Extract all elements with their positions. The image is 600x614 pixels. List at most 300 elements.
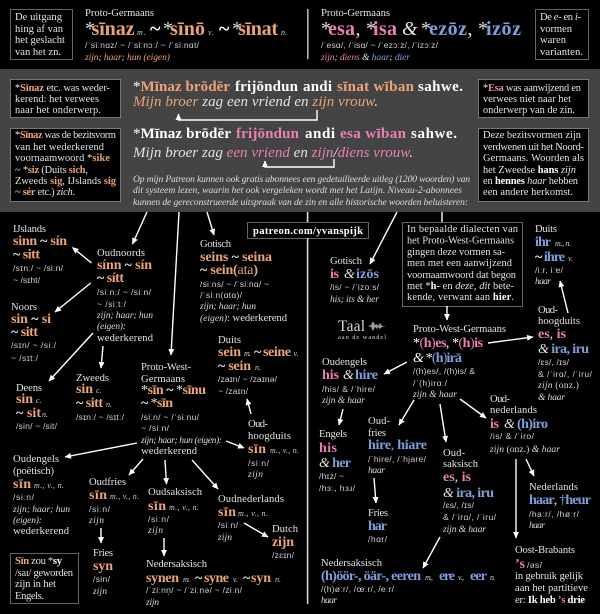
node: Noors: /sɪn/ ~ /siː/ — [11, 340, 57, 350]
node: IJslands — [13, 224, 67, 285]
node: Nedersaksisch (synen): syn — [251, 571, 271, 586]
node: Oudengels (his, hire): his — [322, 368, 340, 383]
note: reflexive: kerend: het verwees — [15, 94, 99, 105]
node: Nedersaksisch (synen): zijn — [145, 597, 159, 608]
arrow: PWG to Oudnederlands — [460, 399, 486, 418]
note: gender ending: De uitgang — [15, 12, 63, 23]
node: Zweeds: c. — [96, 386, 102, 395]
node: Proto-West-Germaans (sīn): /siːn/ ~ /ˈsiːnu/ — [141, 412, 200, 422]
node: Gotisch (right): /is/ ~ /ˈizoːs/ — [330, 282, 380, 292]
node: Oudnederlands (is, (h)iro): zijn (onz.) & haar — [489, 444, 560, 455]
node: IJslands: IJslands — [13, 224, 46, 235]
node: Noors: Noors — [11, 302, 37, 313]
note: gender ending: het geslacht — [15, 35, 65, 46]
reflexive possessive forms: sīnaz — [92, 18, 135, 40]
demonstrative forms: zijn; diens & haar; dier — [320, 52, 410, 63]
node: Proto-West-Germaans (his): *(h)es, *(h)is — [413, 336, 484, 351]
node: Nederlands: Nederlands — [529, 482, 578, 493]
arrow: PWG to Oudsaksisch — [440, 404, 446, 442]
Patreon paragraph — [133, 174, 470, 208]
note: *sy in English: Engels. — [15, 591, 44, 602]
node: Oudnoords: wederkerend — [97, 333, 154, 344]
demonstrative forms: /ˈesɑ/, /ˈisɑ/ ~ /ˈezɔːz/, /ˈizɔːz/ — [321, 40, 439, 50]
node: Oudsaksisch (sīn): sīn — [148, 499, 166, 514]
node: Nedersaksisch ((h)öör-) — [321, 558, 495, 606]
node: Nedersaksisch (synen): ~ — [195, 571, 203, 586]
node: Proto-West-Germaans (his): /(h)es/, /(h)is/ & — [413, 366, 475, 376]
node: Oudengels (poëtisch): Oudengels — [13, 454, 59, 465]
callout: dialect merge with *h- — [402, 222, 522, 306]
node: Oudhoogduits (sīn): sīn — [248, 442, 266, 457]
node: Nedersaksisch ((h)öör-): v., — [458, 573, 464, 582]
link box: patreon: patreon.com/yvanspijk — [253, 226, 363, 237]
arrow: Oudnederlands to Oost-Brabants — [515, 459, 517, 538]
arrow: band to Gotisch — [207, 212, 214, 235]
node: Deens: Deens — [16, 383, 42, 394]
node: Fries (syn): syn — [93, 559, 113, 574]
node: Nedersaksisch (synen): syne — [204, 571, 229, 586]
sentence 1 — [132, 79, 463, 110]
node: Nedersaksisch ((h)öör-): m., — [425, 573, 433, 582]
note: reflexive — [10, 80, 120, 118]
sentence 2: Mijn broer zag een vriend en zijn/diens vrouw. — [132, 145, 413, 161]
arrow: Oudnoords to IJslands — [72, 248, 92, 263]
node: Oudhoogduits (es, is): Oud- — [538, 305, 558, 316]
node: Noors: sin ~ si — [11, 312, 51, 327]
demonstrative forms: , — [468, 18, 472, 40]
node: Zweeds: sin — [76, 382, 93, 397]
note: disappeared in North Germanic — [478, 80, 588, 118]
demonstrative forms: * — [478, 18, 488, 40]
reflexive possessive forms: n. — [281, 28, 287, 37]
node: Duits (ihr): m., n. — [555, 239, 571, 248]
node: Gotisch (left): ~ sein(ata) — [200, 263, 258, 278]
demonstrative forms: ezōz — [429, 18, 467, 40]
note: possessive of *sike: van het wederkerend — [15, 142, 105, 153]
Patreon paragraph: dit systeem lezen, waarin het ook vergeleken wordt met het Latijn. Niveau-2-abonnees — [133, 185, 462, 196]
arrow: Oudnederlands to Dutch — [244, 523, 268, 537]
Patreon paragraph: Op mijn Patreon kunnen ook gratis abonnees een gedetailleerde uitleg (1200 woorden) van — [133, 174, 470, 185]
node: Oudsaksisch (es, is): zijn & haar — [442, 524, 486, 535]
node: Nedersaksisch ((h)öör-): (h)öör-, öär-, eeren — [321, 569, 421, 584]
node: Proto-West-Germaans (sīn): *sīn ~ *sīnu — [141, 383, 206, 398]
node: Duits (sein): sein — [218, 345, 241, 360]
node: Oudhoogduits (es, is) — [537, 305, 593, 403]
node: Oudsaksisch (es, is): & ira, iru — [443, 486, 494, 501]
note: reflexive: *Sīnaz etc. was weder- — [15, 83, 111, 94]
node: Oudnederlands (sīn): m., v., n. — [238, 509, 268, 518]
arrow: PWG to Oudhoogduits — [226, 441, 244, 448]
node: Oudengels (poëtisch) — [12, 454, 70, 537]
node: Duits (sein): m. — [244, 349, 251, 358]
node: Duits (ihr): ~ ihre — [535, 250, 565, 265]
node: Oudhoogduits (sīn) — [247, 419, 299, 480]
note: *sy in English: /saɪ/ geworden — [15, 568, 74, 579]
node: Oudhoogduits (es, is): zijn (onz.) — [537, 380, 579, 391]
note: gender ending — [10, 10, 72, 60]
arrow: Oudnederlands to Nederlands — [526, 459, 534, 476]
node: Proto-West-Germaans (his): zijn & haar — [412, 389, 457, 400]
node: Oudnederlands (is, (h)iro): & — [504, 417, 515, 432]
node: Oudhoogduits (sīn): /siːn/ — [248, 458, 270, 468]
node: Dutch (zijn): /zɛɪn/ — [272, 550, 295, 560]
node: Deens: ~ sit — [16, 406, 41, 421]
node: Oudfries (hire, hiare): fries — [368, 428, 386, 439]
note: possessive of *sike: ~ *siz (Duits sich, — [15, 165, 88, 176]
reflexive possessive forms: /ˈsiːnɑz/ ~ /ˈsiːnɔː/ ~ /ˈsiːnɑt/ — [85, 40, 200, 50]
node: Proto-West-Germaans (sīn): ~ *sīn — [141, 396, 173, 411]
node: Oudhoogduits (sīn): zijn — [247, 469, 263, 480]
node: Oudfries (sīn): Oudfries — [89, 477, 126, 488]
node: Oudhoogduits (sīn): Oud- — [248, 419, 268, 430]
node: Duits (sein): seine — [263, 345, 291, 360]
arrow: PWG to Engels branch — [339, 409, 343, 425]
node: Oudengels (poëtisch): m., v., n. — [34, 481, 64, 490]
node: Duits (ihr): ihr — [535, 235, 551, 250]
node: Oudsaksisch (sīn): zijn — [147, 525, 163, 536]
node: Deens: n. — [42, 410, 48, 419]
note: e- and i- variants: waren — [540, 35, 567, 46]
node: Oost-Brabants: er: Ik heb ʼs drie — [515, 595, 585, 606]
node: Oudengels (his, hire): Oudengels — [322, 357, 367, 368]
node: Gotisch (right): & — [344, 267, 355, 282]
demonstrative forms: * — [366, 18, 376, 40]
node: Gotisch (left) — [199, 239, 288, 324]
callout: dialect merge with *h-: men met een aanwijzend — [407, 258, 513, 269]
node: Proto-West-Germaans (sīn): Germaans — [141, 374, 185, 385]
node: Oudfries (hire, hiare): hire, hiare — [368, 438, 427, 453]
arrow: Oudnoords to Zweeds — [101, 346, 103, 368]
node: Oudnederlands (is, (h)iro): Oud- — [490, 394, 510, 405]
node: IJslands: /sɪnː/ ~ /siːn/ — [13, 263, 64, 273]
sentence 1: sahwe. — [418, 79, 463, 95]
node: Nedersaksisch ((h)öör-): /(h)øːr/, /œːr/, /eːr/ — [321, 584, 395, 594]
node: Deens: c. — [36, 396, 42, 405]
divider — [307, 9, 309, 59]
node: Oudfries (sīn): m., v., n. — [110, 492, 139, 501]
node: Oudnoords: zijn; haar; hun — [96, 310, 153, 321]
sentence 2: esa wīban — [340, 126, 407, 142]
node: Dutch (zijn): Dutch — [272, 524, 299, 535]
Patreon paragraph: kunnen de gereconstrueerde uitspraak van de zin en alle historische woorden beluisteren: — [133, 197, 468, 208]
note: e- and i- variants: varianten. — [540, 47, 583, 58]
node: Engels: /hɪz/ ~ — [319, 471, 344, 481]
callout: dialect merge with *h-: met *h- en deze, dit bete- — [407, 281, 515, 292]
note: possessive of *sike: voornaamwoord *sike — [15, 153, 110, 164]
node: Oudengels (poëtisch): sīn — [13, 477, 31, 492]
node: Oudengels (his, hire): zijn & haar — [321, 395, 365, 406]
node: Zweeds: ~ sitt — [76, 396, 103, 411]
node: Oudfries (sīn): zijn — [88, 515, 104, 526]
node: Oudnoords: ~ sítt — [97, 271, 124, 286]
icon: sound wave — [368, 321, 386, 331]
node: Gotisch (right): Gotisch — [330, 256, 363, 267]
reflexive possessive forms: * — [85, 18, 95, 40]
node: Fries (har): /hɑr/ — [368, 534, 388, 544]
node: Engels — [319, 429, 356, 493]
node: Oost-Brabants: ʼs — [515, 557, 526, 572]
node: Oudnederlands (is, (h)iro) — [489, 394, 560, 455]
arrow: Oudsaksisch to Nedersaksisch — [423, 537, 440, 568]
node: Oudsaksisch (es, is): /ɛs/, /ɪs/ — [443, 500, 475, 510]
node: Oudsaksisch (es, is): es, is — [443, 470, 472, 485]
node: Proto-West-Germaans (his): Proto-West-Germaans — [413, 324, 506, 335]
node: Deens: sin — [16, 392, 33, 407]
node: Oudfries (hire, hiare): /ˈhire/, /ˈhjare/ — [368, 454, 427, 464]
arrow: Oudfries to Fries — [100, 528, 102, 543]
node: Zweeds: Zweeds — [76, 373, 109, 384]
sentence 2: andi — [305, 126, 335, 142]
node: Nedersaksisch (synen): /ˈziːnn̩/ ~ /ˈziːnə/ ~ /ziːn/ — [146, 585, 243, 595]
demonstrative forms: * — [421, 18, 431, 40]
note: disappeared in North Germanic: verwees niet naar het — [483, 94, 571, 105]
node: Fries (har): har — [368, 519, 387, 534]
node: Oudnederlands (sīn): sīn — [218, 505, 236, 520]
arrow: PWG to Oudengels — [65, 443, 137, 457]
demonstrative forms: isa — [373, 18, 397, 40]
reflexive possessive forms: Proto-Germaans — [85, 8, 154, 19]
arrow: Oudnoords to Noors — [55, 283, 91, 312]
node: Duits (sein): n. — [255, 363, 261, 372]
note: gender ending: hing af van — [15, 24, 64, 35]
node: Fries (syn): Fries — [93, 548, 113, 559]
node: Oudhoogduits (sīn): hoogduits — [248, 431, 291, 442]
node: Nederlands: haar — [529, 520, 545, 531]
node: IJslands: sinn ~ sín — [13, 234, 67, 249]
node: Oudnoords: /siːnː/ ~ /siːn/ — [97, 287, 152, 297]
demonstrative forms: * — [321, 18, 331, 40]
callout: dialect merge with *h-: voornaamwoord dat begon — [407, 270, 517, 281]
node: Deens — [16, 383, 58, 431]
node: Oost-Brabants: /əs/ — [527, 560, 543, 570]
node: Proto-West-Germaans (sīn): ~ /siːn/ — [141, 423, 170, 433]
note: possessive of *sike: ~ sér etc.) zich. — [15, 187, 75, 198]
node: Oudengels (poëtisch): (eigen): — [13, 515, 42, 526]
node: Duits (sein): ~ sein — [218, 359, 251, 374]
tree divider — [307, 238, 308, 604]
node: Oudfries (hire, hiare): haar — [368, 465, 385, 476]
sentence 2: frijōndun — [236, 126, 300, 142]
node: Oudnederlands (is, (h)iro): is — [490, 417, 500, 432]
node: Oudsaksisch (sīn): m., v., n. — [169, 503, 199, 512]
sentence 2: sahwe. — [411, 126, 457, 142]
demonstrative forms: izōz — [486, 18, 521, 40]
node: Dutch (zijn) — [272, 524, 299, 560]
node: Nedersaksisch (synen): v. — [233, 575, 238, 584]
node: Oudnederlands (sīn): Oudnederlands — [218, 494, 284, 505]
sentence 1: *Mīnaz brōdēr — [133, 79, 230, 95]
node: Zweeds: /sɪnː/ ~ /sɪtː/ — [76, 412, 125, 422]
node: Proto-West-Germaans (sīn) — [140, 362, 222, 457]
node: Engels: Engels — [319, 429, 347, 440]
node: Oudengels (his, hire): hire — [355, 368, 378, 383]
note: North Germanic possessives: Deze bezitsvormen zijn — [483, 130, 582, 141]
node: Oost-Brabants — [515, 545, 588, 606]
node: Gotisch (left): zijn; haar; hun — [199, 301, 256, 312]
arrow: PWG to Oudengels — [384, 362, 407, 374]
node: IJslands: ~ /sɪht/ — [13, 275, 41, 285]
node: Duits (ihr): haar — [535, 276, 551, 287]
note: possessive of *sike — [10, 128, 120, 202]
sentence 1: andi — [303, 79, 332, 95]
note: *sy in English — [10, 554, 78, 604]
node: Duits (ihr): /iːr, iːɐ/ — [535, 265, 564, 275]
node: Fries (har): Fries — [368, 508, 388, 519]
node: Nederlands: haar, †heur — [529, 493, 591, 508]
node: Oudnederlands (is, (h)iro): (h)iro — [517, 417, 548, 432]
node: Oudfries (hire, hiare): Oud- — [368, 416, 390, 427]
node: Oudsaksisch (es, is): saksisch — [443, 459, 479, 470]
node: Duits (ihr): Duits — [535, 224, 557, 235]
demonstrative forms: & — [402, 18, 418, 40]
node: Gotisch (left): /ˈsiːn(ɑtɑ)/ — [200, 290, 243, 300]
reflexive possessive forms: ~ — [219, 18, 230, 40]
arrow: zijn refers to vriend — [265, 159, 334, 167]
arrow: band to Proto-West-Germaans — [171, 212, 179, 355]
node: Oudfries (sīn): /siːn/ — [89, 504, 111, 514]
node: Oudengels (his, hire): /his/ & /ˈhire/ — [322, 384, 376, 394]
node: Duits (sein): ~ /zaɪn/ — [218, 386, 249, 396]
arrow: PWG to Oudfries — [129, 459, 143, 475]
node: Zweeds — [76, 373, 125, 422]
node: Oudsaksisch (sīn): /siːn/ — [148, 514, 170, 524]
node: Gotisch (left): (eigen): wederkerend — [200, 313, 288, 324]
logo: Taal aan de wandel — [338, 318, 386, 341]
reflexive possessive forms: zijn; haar; hun (eigen) — [84, 52, 170, 63]
node: Oudhoogduits (es, is): hoogduits — [538, 316, 580, 327]
arrow: PWG to Oudsaksisch — [165, 460, 166, 484]
node: Proto-West-Germaans (sīn): Proto-West- — [141, 362, 191, 373]
node: Nedersaksisch ((h)öör-): ere — [439, 569, 455, 584]
node: Oudengels (poëtisch): (poëtisch) — [13, 466, 54, 477]
note: North Germanic possessives: en hennes haar hebben — [483, 176, 579, 187]
node: Oudsaksisch (sīn): Oudsaksisch — [148, 487, 203, 498]
node: Duits (sein): Duits — [218, 335, 241, 346]
node: Oudnederlands (sīn): /siːn/ — [218, 520, 239, 530]
logo: Taal aan de wandel: aan de wandel — [338, 334, 386, 341]
note: North Germanic possessives: een andere herkomst. — [483, 187, 573, 198]
node: Oudhoogduits (es, is): & ira, iru — [538, 342, 589, 357]
node: Proto-West-Germaans (his): & *(h)irā — [413, 351, 462, 366]
reflexive possessive forms: m. — [137, 28, 146, 37]
node: Nedersaksisch (synen): synen — [146, 571, 179, 586]
node: Gotisch (right): is — [330, 267, 340, 282]
node: Oudhoogduits (es, is): es, is — [538, 327, 567, 342]
node: Duits (ihr): v. — [568, 254, 573, 263]
arrow: Oudsaksisch to Nedersaksisch — [163, 538, 165, 556]
node: Noors: ~ sitt — [11, 325, 38, 340]
node: Nedersaksisch (synen): ~ — [243, 571, 251, 586]
node: Oost-Brabants: in gebruik gelijk — [515, 571, 584, 582]
node: Gotisch (left): Gotisch — [200, 239, 232, 250]
node: Oudsaksisch (es, is): Oud- — [443, 448, 465, 459]
note: e- and i- variants: De e- en i- — [540, 12, 581, 23]
node: Deens: /sin/ ~ /sit/ — [16, 421, 58, 431]
node: Engels: his — [319, 441, 338, 456]
node: Zweeds: n. — [106, 400, 112, 409]
connector: band to callout — [441, 212, 443, 222]
node: Proto-West-Germaans (his) — [412, 324, 506, 400]
node: Fries (syn) — [92, 548, 113, 597]
logo: Taal aan de wandel: Taal — [338, 318, 365, 335]
arrow: PWG to Oudhoogduits — [488, 337, 533, 343]
link box: patreon — [248, 222, 368, 238]
node: Oudsaksisch (es, is) — [442, 448, 497, 535]
reflexive possessive forms: ~ — [150, 18, 161, 40]
arrow: Oudhoogduits to Duits — [247, 399, 251, 414]
note: North Germanic possessives: het Zweedse hans zijn — [483, 165, 576, 176]
node: Duits (sein): /zaɪn/ ~ /zaɪnə/ — [218, 374, 278, 384]
arrow: Oudfries to Fries — [374, 478, 376, 503]
node: Gotisch (right): izōs — [356, 267, 380, 282]
node: Oudhoogduits (es, is): /ɛs/, /ɪs/ — [538, 357, 570, 367]
node: Oudsaksisch (es, is): & /ˈirɑ/, /ˈiru/ — [443, 512, 497, 522]
node: Oudnoords: sínn ~ sín — [97, 258, 152, 273]
node: Nedersaksisch ((h)öör-): Nedersaksisch — [321, 558, 383, 569]
node: Nedersaksisch ((h)öör-): n. — [490, 573, 495, 582]
demonstrative forms: , — [356, 18, 360, 40]
note: e- and i- variants — [536, 10, 588, 60]
node: Oost-Brabants: Oost-Brabants — [515, 545, 575, 556]
node: Proto-West-Germaans (sīn): zijn; haar; hun (eigen): — [140, 435, 222, 446]
node: Oudfries (sīn): sīn — [89, 488, 107, 503]
node: Oudengels (his, hire): & — [343, 368, 354, 383]
node: Duits (sein) — [218, 335, 298, 396]
callout: dialect merge with *h-: het Proto-West-Germaans — [407, 236, 514, 246]
node: Oudsaksisch (sīn) — [147, 487, 203, 536]
arrow: callout to Proto-West-Germaans — [446, 306, 448, 320]
note: *sy in English: Sīn zou *sy — [15, 556, 63, 567]
reflexive possessive forms: * — [163, 18, 173, 40]
node: Engels: & her — [319, 456, 351, 471]
node: Oudengels (poëtisch): wederkerend — [13, 526, 70, 537]
note: possessive of *sike: Zweeds sig, IJslands sig — [15, 176, 117, 187]
node: Gotisch (right) — [330, 256, 380, 305]
reflexive possessive forms — [84, 8, 287, 63]
arrow: Oudhoogduits to Duits — [560, 281, 568, 313]
node: Duits (sein): ~ — [254, 345, 262, 360]
node: Oudnederlands (sīn): zijn — [217, 532, 232, 543]
node: Nedersaksisch (synen): m. — [183, 575, 190, 584]
node: Nederlands — [529, 482, 591, 531]
arrow: band to Gotisch right — [370, 212, 397, 264]
node: Oudnederlands (is, (h)iro): /is/ & /ˈiro/ — [490, 431, 535, 441]
note: gender ending: van het zn. — [15, 47, 61, 58]
note: disappeared in North Germanic: onderwerp van de zin. — [483, 105, 575, 116]
callout: dialect merge with *h-: kende, verwant aan hier. — [407, 292, 514, 303]
arrow: PWG to Oudfries — [399, 400, 414, 425]
node: Gotisch (right): his; its & her — [330, 294, 379, 305]
sentence 1: frijōndun — [235, 79, 299, 95]
node: Oudengels (his, hire) — [321, 357, 378, 406]
node: Duits (sein): v. — [294, 349, 298, 358]
node: Nedersaksisch (synen) — [145, 559, 281, 608]
node: Oudnederlands (sīn) — [217, 494, 284, 543]
note: *sy in English: zijn in het — [15, 579, 56, 590]
node: Nedersaksisch (synen): Nedersaksisch — [146, 559, 208, 570]
note: reflexive: naar het onderwerp. — [15, 105, 101, 116]
node: Oudhoogduits (es, is): & haar — [538, 392, 565, 403]
node: Nedersaksisch ((h)öör-): eer — [470, 569, 487, 584]
arrow: Oudnoords to Deens — [49, 333, 93, 381]
node: Oudhoogduits (es, is): & /ˈirɑ/, /ˈiru/ — [538, 369, 593, 379]
arrow: Patreon band to Oudnoords — [132, 212, 147, 244]
node: Nedersaksisch ((h)öör-): haar — [321, 595, 337, 606]
node: Noors: ~ /sɪtː/ — [11, 353, 39, 363]
arrow: PWG to Oudnederlands — [192, 460, 218, 489]
note: e- and i- variants: vormen — [540, 24, 573, 35]
note: possessive of *sike: *Sīnaz was de bezitsvorm — [15, 130, 116, 141]
